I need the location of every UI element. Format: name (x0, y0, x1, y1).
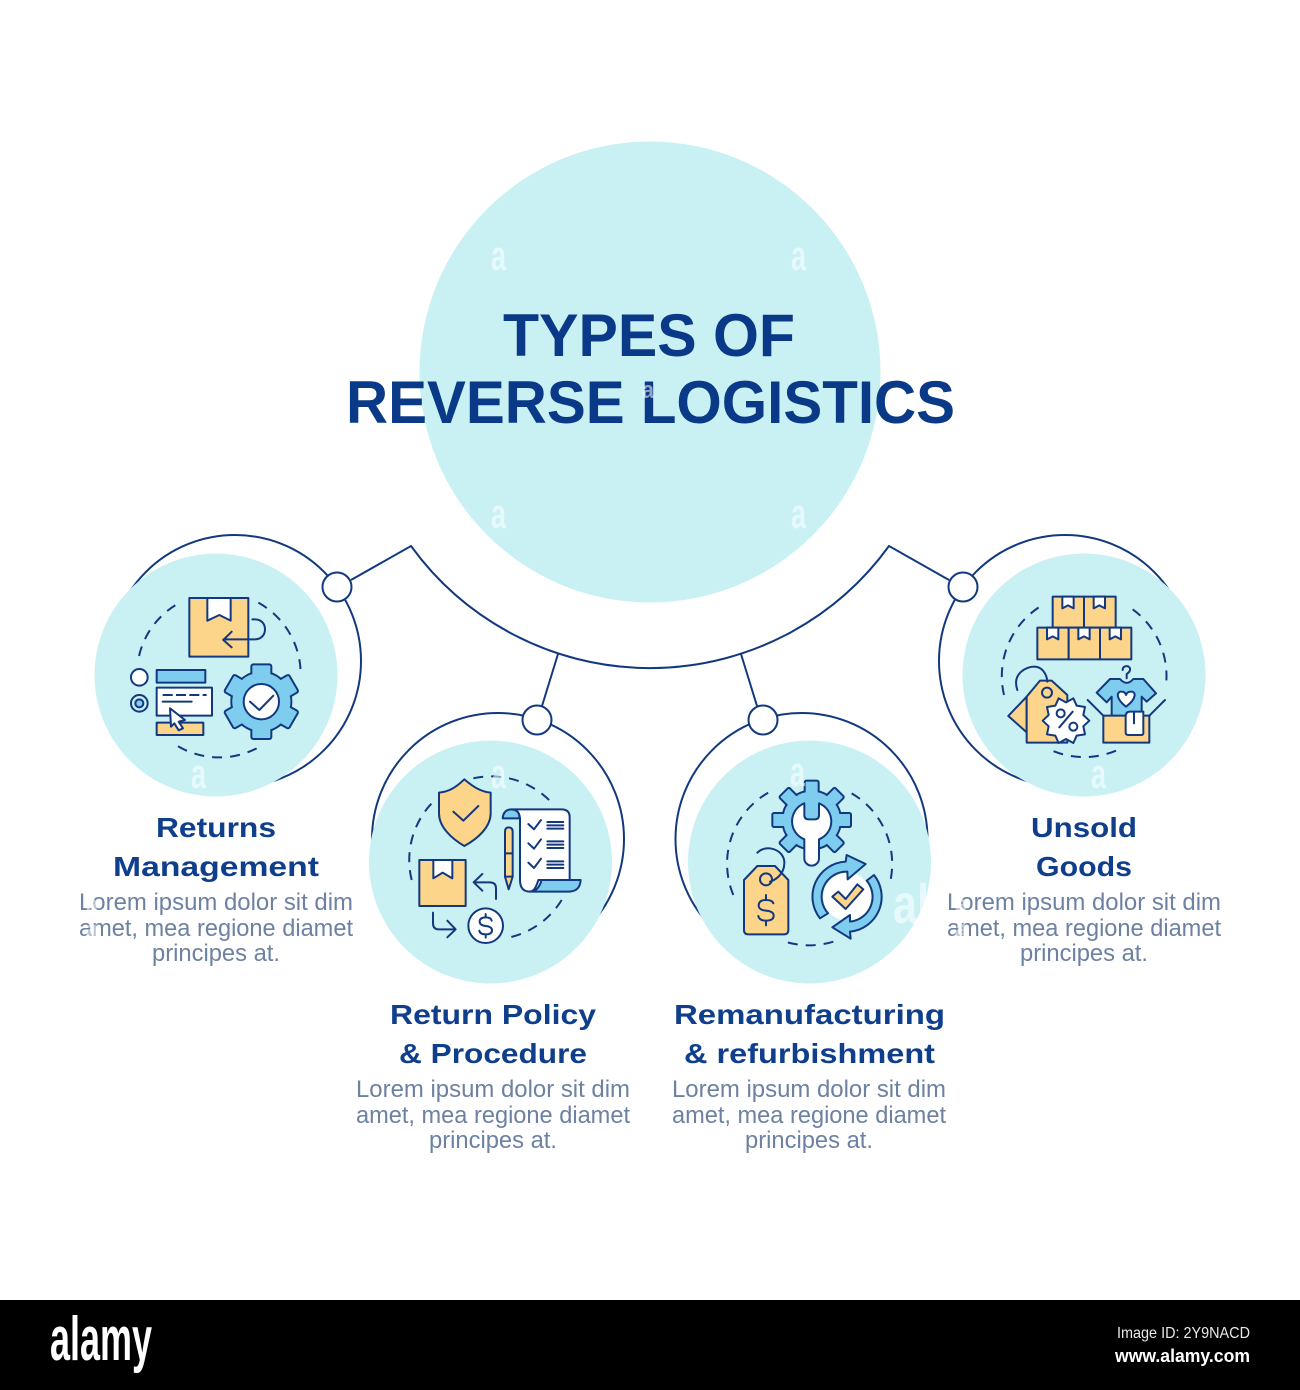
description: amet, mea regione diamet (947, 915, 1221, 942)
outer ring (109, 535, 361, 787)
icon: shield, policy scroll, box and refund (409, 776, 581, 943)
description (672, 1076, 946, 1154)
connector node (948, 572, 978, 602)
heading: & refurbishment (684, 1038, 935, 1069)
heading: Returns (156, 812, 276, 843)
badge circle (94, 554, 338, 796)
description: principes at. (1020, 940, 1148, 967)
image id: Image ID: 2Y9NACD (1117, 1325, 1250, 1342)
watermark marks: a (955, 891, 968, 918)
connector node (748, 706, 778, 734)
watermark marks: a (86, 916, 99, 943)
panel: return policy and procedure (356, 706, 630, 1154)
description: Lorem ipsum dolor sit dim (947, 889, 1221, 916)
icon: wrench gear, price tag and refresh (727, 781, 892, 945)
watermark marks: a (491, 490, 506, 537)
watermark marks: a (955, 916, 968, 943)
description: Lorem ipsum dolor sit dim (79, 889, 353, 916)
title: REVERSE LOGISTICS (346, 369, 955, 436)
watermark marks: a (86, 891, 99, 918)
heading: Return Policy (390, 999, 596, 1030)
watermark marks: a (491, 232, 506, 279)
watermark marks (86, 232, 1106, 943)
outer ring (372, 713, 624, 965)
heading: Management (113, 851, 319, 882)
description (356, 1076, 630, 1154)
watermark marks: a (791, 490, 806, 537)
description: principes at. (152, 940, 280, 967)
heading: Goods (1036, 851, 1132, 882)
watermark marks: a (191, 750, 206, 797)
connector node (522, 706, 552, 734)
description: amet, mea regione diamet (356, 1102, 630, 1129)
badge circle (688, 740, 931, 984)
connector lines (351, 546, 949, 706)
panel: returns management (79, 535, 361, 967)
description: amet, mea regione diamet (79, 915, 353, 942)
description: Lorem ipsum dolor sit dim (356, 1076, 630, 1103)
watermark marks: a (642, 377, 655, 404)
description: principes at. (745, 1127, 873, 1154)
icon: stacked boxes, discount tag and clothing (1002, 597, 1167, 757)
outer ring (939, 535, 1191, 787)
description: amet, mea regione diamet (672, 1102, 946, 1129)
footer url: www.alamy.com (1114, 1346, 1250, 1366)
title: TYPES OF (503, 302, 795, 369)
heading (113, 812, 319, 882)
heading (674, 999, 945, 1069)
heading: & Procedure (399, 1038, 587, 1069)
icon: returned box, form and gear (131, 598, 301, 757)
panel: unsold goods (939, 535, 1221, 967)
badge circle (962, 554, 1206, 796)
central title circle (420, 142, 880, 602)
heading: Remanufacturing (674, 999, 945, 1030)
heading (390, 999, 596, 1069)
title (346, 302, 955, 436)
heading: Unsold (1031, 812, 1137, 843)
connector node (322, 572, 352, 602)
description (79, 889, 353, 967)
footer logo: alamy (50, 1305, 152, 1374)
panel: remanufacturing and refurbishment (672, 706, 946, 1154)
watermark marks: a (491, 750, 506, 797)
outer ring (676, 713, 928, 965)
watermark marks: al (893, 872, 929, 935)
heading (1031, 812, 1137, 882)
description: Lorem ipsum dolor sit dim (672, 1076, 946, 1103)
watermark marks: a (791, 232, 806, 279)
footer bar (0, 1300, 1300, 1390)
description (947, 889, 1221, 967)
watermark marks: a (790, 748, 805, 795)
badge circle (369, 740, 612, 984)
watermark marks: a (1091, 750, 1106, 797)
description: principes at. (429, 1127, 557, 1154)
